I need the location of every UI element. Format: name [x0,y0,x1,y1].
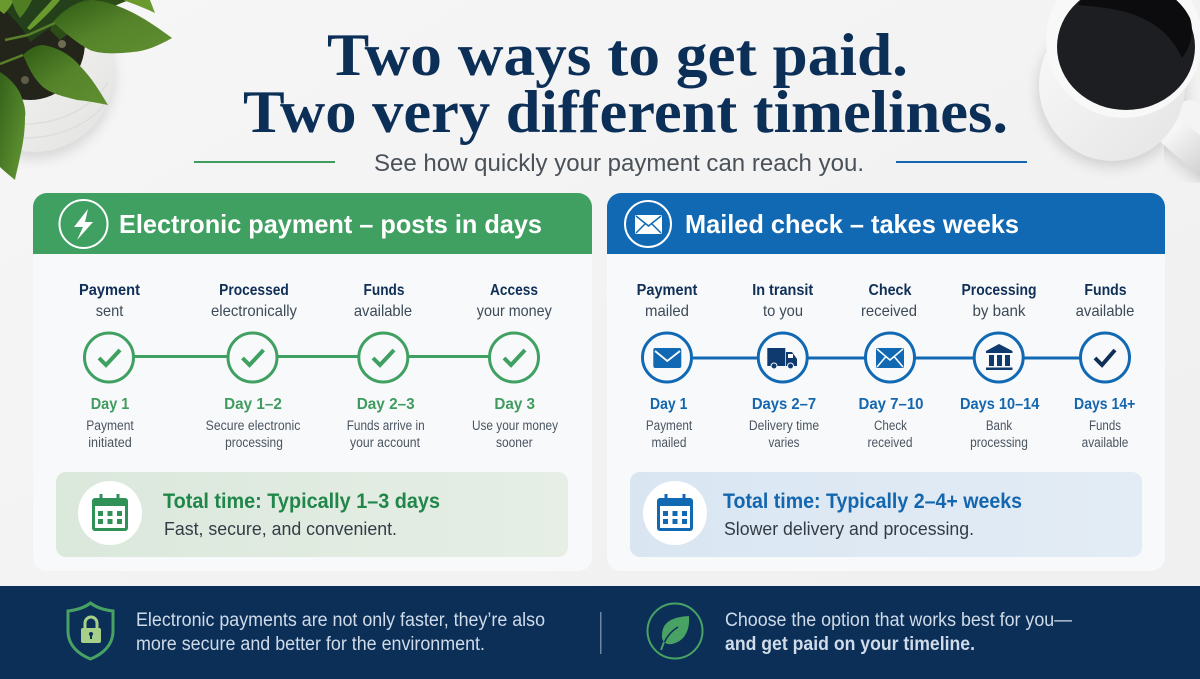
step 5: funds available: available [1082,435,1128,450]
callout: total time mailed: Slower delivery and processing. [724,519,974,539]
step 2: processed electronically: Secure electronic [206,418,301,433]
step 2: in transit: In transit [752,282,814,299]
step 3: funds available: Funds arrive in [347,418,425,433]
step 5: funds available: Funds [1084,282,1127,299]
step 2: in transit: Delivery time [749,418,819,433]
callout: total time electronic: Fast, secure, and convenient. [164,519,397,539]
icon: calendar green [78,481,142,545]
step 4: processing by bank: Processing [962,282,1036,299]
footer text: call to action [725,610,1072,655]
step 2: processed electronically: electronically [211,303,297,320]
step 1: payment sent: Payment [86,418,134,433]
step 3: funds available: Funds [364,282,405,299]
step 3: funds available: available [354,303,412,320]
photo: potted plant [0,0,172,180]
step 1: payment sent [79,282,141,450]
panel header: electronic payment [33,193,592,254]
step 1: payment mailed: Payment [637,282,698,299]
step 1: payment sent: Payment [79,282,141,299]
footer band [0,586,1200,679]
step 4: processing by bank: Days 10–14 [960,396,1039,413]
title: Two very different timelines. [243,79,1008,145]
step 3: check received: Day 7–10 [858,396,924,413]
callout: total time electronic: Total time: Typically 1–3 days [163,490,440,513]
step 1: payment mailed: mailed [652,435,686,450]
step 3: funds available [347,282,425,450]
step 3: check received [858,282,924,450]
icon: lightning bolt [60,200,108,248]
step 4: access your money: Access [490,282,538,299]
timeline connector [134,355,490,358]
step 4: access your money [472,282,558,450]
footer text: security message: Electronic payments are not only faster, they’re also [136,610,545,631]
step 3: check received: Check [874,418,907,433]
title: Two ways to get paid. [327,22,908,88]
step 5: funds available: available [1076,303,1134,320]
step 5: funds available: Funds [1089,418,1121,433]
footer text: call to action: and get paid on your timeline. [725,634,975,655]
icon: calendar blue [643,481,707,545]
callout: total time electronic [56,472,568,557]
step 2: processed electronically: Day 1–2 [224,396,282,413]
step 4: processing by bank [960,282,1039,450]
step 1: payment sent: Day 1 [91,396,129,413]
step 5: funds available: Days 14+ [1074,396,1135,413]
photo: coffee mug [1038,0,1200,172]
panel: mailed check [607,193,1165,571]
step 4: access your money: Use your money [472,418,558,433]
timeline connector [690,356,1110,360]
step 2: in transit: Days 2–7 [752,396,816,413]
step 1: payment mailed: Day 1 [650,396,687,413]
icon: envelope in circle [625,201,671,247]
step 3: funds available: your account [350,435,420,450]
step 1: payment mailed [637,282,698,450]
step 4: processing by bank: processing [970,435,1028,450]
step 1: payment mailed: Payment [646,418,692,433]
footer text: security message [136,610,545,655]
step 1: payment sent: initiated [88,435,132,450]
subtitle: See how quickly your payment can reach you. [374,150,864,177]
step 2: processed electronically: Processed [219,282,289,299]
callout: total time mailed: Total time: Typically 2–4+ weeks [723,490,1022,513]
step 3: check received: received [861,303,917,320]
step 4: processing by bank: Bank [986,418,1012,433]
callout: total time mailed [630,472,1142,557]
panel header: electronic payment: Electronic payment – posts in days [119,209,542,239]
footer text: call to action: Choose the option that works best for you— [725,610,1072,631]
step 2: in transit [749,282,819,450]
step 4: access your money: Day 3 [494,396,535,413]
title [243,22,1008,145]
step 5: funds available [1074,282,1135,450]
step 1: payment sent: sent [96,303,124,320]
panel header: mailed check [607,193,1165,254]
icon: leaf in circle [648,604,702,658]
step 1: payment mailed: mailed [645,303,689,320]
step 2: in transit: varies [768,435,800,450]
step 3: check received: received [868,435,912,450]
panel header: mailed check: Mailed check – takes weeks [685,209,1019,239]
step 3: check received: Check [868,282,912,299]
step 2: processed electronically: processing [225,435,283,450]
footer text: security message: more secure and better for the environment. [136,634,485,655]
step 2: in transit: to you [763,303,803,320]
step 4: processing by bank: by bank [972,303,1026,320]
step 4: access your money: sooner [496,435,533,450]
icon: shield with lock [68,603,113,659]
step 4: access your money: your money [477,303,552,320]
panel: electronic payment [33,193,592,571]
step 2: processed electronically [206,282,301,450]
step 3: funds available: Day 2–3 [357,396,415,413]
